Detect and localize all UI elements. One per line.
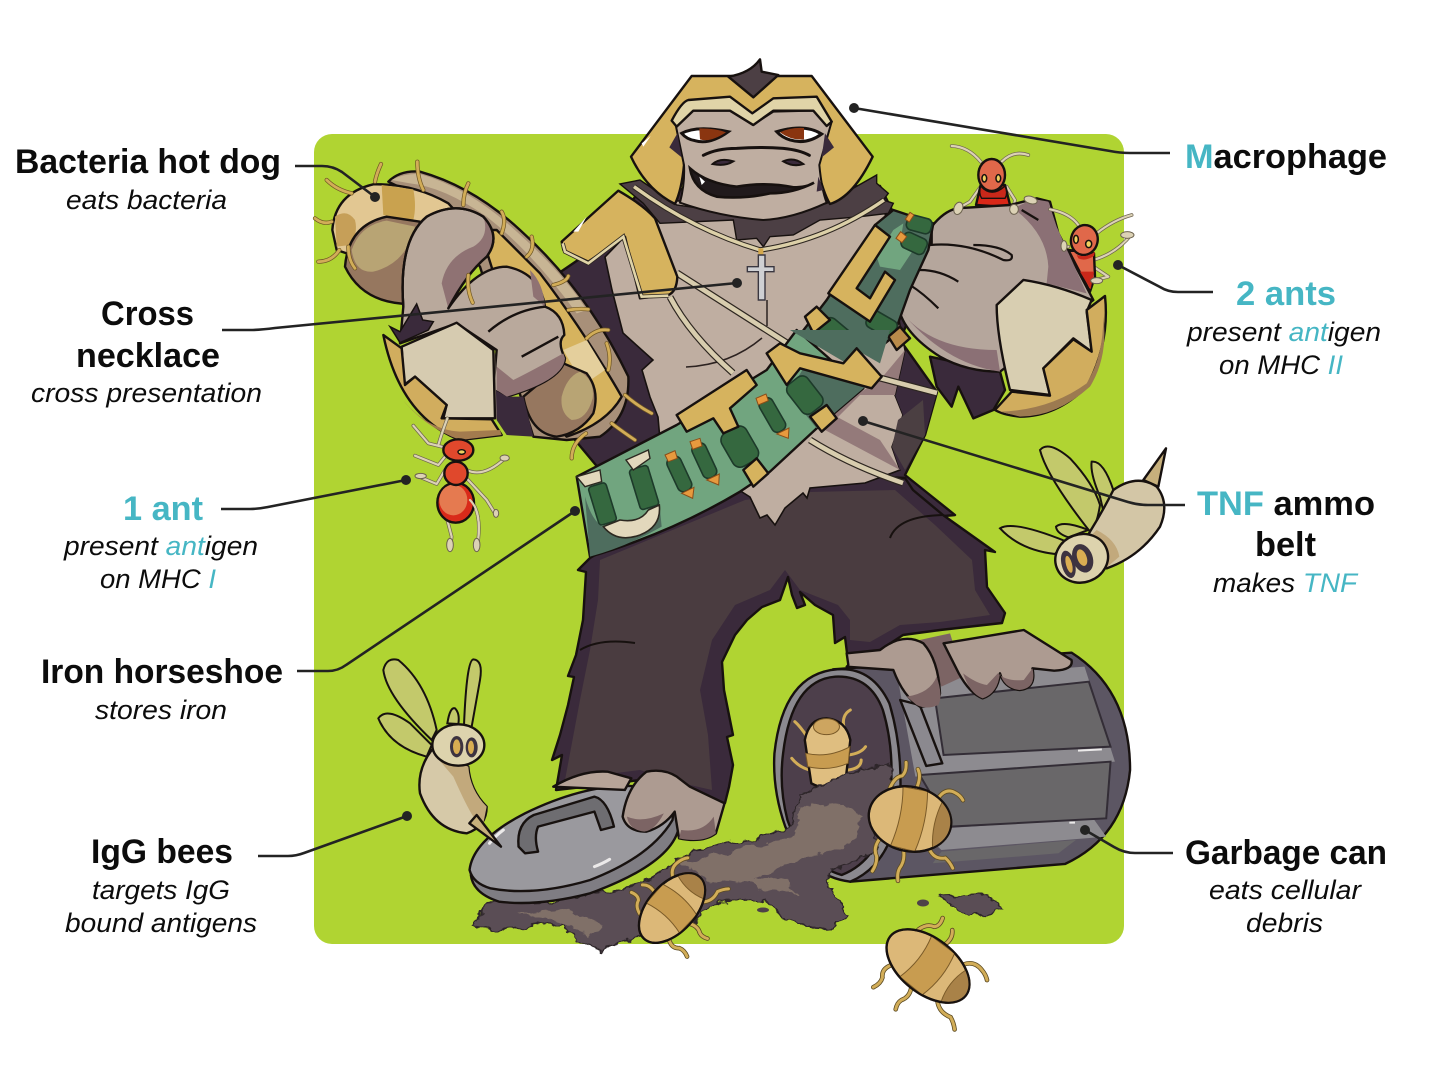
head and helmet	[631, 59, 873, 220]
label: TNF ammo belt	[1197, 485, 1375, 598]
label: IgG bees: bound antigens	[65, 908, 257, 938]
right fist and gauntlet	[898, 195, 1106, 418]
illustration: macrophage gorilla	[315, 59, 1166, 1045]
neck cord and cross	[634, 187, 884, 300]
ant: side of fist	[1050, 209, 1134, 292]
foot on lid	[553, 771, 725, 840]
connector: 1 ant	[221, 475, 411, 509]
label: 2 ants: present antigen	[1186, 317, 1381, 347]
connector: macrophage	[849, 103, 1170, 153]
connector: iron horseshoe	[297, 506, 580, 671]
label: cross necklace: Cross	[101, 295, 194, 333]
left shoulder pad	[562, 191, 677, 298]
label: 1 ant: present antigen	[63, 531, 258, 561]
label: garbage can: eats cellular	[1209, 875, 1362, 905]
cross necklace	[670, 273, 937, 483]
letter N	[767, 343, 882, 388]
label: 2 ants: on MHC II	[1219, 350, 1343, 380]
label: bacteria hot dog: eats bacteria	[66, 185, 227, 215]
label: iron horseshoe: stores iron	[95, 695, 227, 725]
label: 1 ant	[63, 490, 258, 594]
label: garbage can: Garbage can	[1185, 834, 1387, 872]
garbage can	[774, 653, 1130, 882]
iron horseshoe	[577, 450, 660, 538]
label: iron horseshoe	[41, 653, 283, 725]
trash lid	[470, 786, 679, 903]
label: 1 ant: 1 ant	[123, 490, 203, 528]
label: IgG bees: targets IgG	[92, 875, 230, 905]
label: garbage can: debris	[1246, 908, 1323, 938]
label: TNF ammo belt: makes TNF	[1213, 568, 1359, 598]
label: macrophage: Macrophage	[1185, 138, 1387, 176]
label: iron horseshoe: Iron horseshoe	[41, 653, 283, 691]
back fur of torso	[530, 186, 955, 520]
label: TNF ammo belt: belt	[1255, 526, 1316, 564]
label: 2 ants: 2 ants	[1236, 275, 1336, 313]
label: 1 ant: on MHC I	[100, 564, 216, 594]
ant: top of fist	[952, 146, 1028, 208]
label: bacteria hot dog: Bacteria hot dog	[15, 143, 281, 181]
connector: cross necklace	[222, 278, 742, 330]
TNF ammo belt	[577, 210, 933, 557]
torso	[605, 200, 937, 525]
bee: upper right	[1000, 446, 1166, 590]
bee: lower left	[378, 659, 501, 847]
connector: bacteria hot dog	[295, 166, 380, 202]
hand on can	[847, 630, 1072, 707]
lower belt	[577, 330, 890, 557]
connector: TNF ammo belt	[858, 416, 1185, 505]
label: bacteria hot dog	[15, 143, 281, 215]
debris crumbs	[757, 900, 929, 912]
connector: IgG bees	[258, 811, 412, 856]
label: cross necklace: necklace	[76, 337, 220, 375]
label: cross necklace: cross presentation	[31, 378, 262, 408]
label: IgG bees: IgG bees	[91, 833, 233, 871]
ant: one ant	[413, 418, 509, 552]
legs	[552, 470, 1005, 805]
debris spill	[473, 763, 1002, 952]
connector: 2 ants	[1113, 260, 1213, 292]
label: garbage can	[1185, 834, 1387, 938]
hot dog fist	[315, 162, 652, 458]
connector: garbage can	[1080, 825, 1173, 853]
bacteria	[614, 757, 1004, 1045]
green background panel	[314, 134, 1124, 944]
label: 2 ants	[1186, 275, 1381, 380]
upper belt	[793, 210, 933, 355]
letter T	[677, 370, 757, 433]
label: IgG bees	[65, 833, 257, 938]
label: cross necklace	[31, 295, 262, 408]
label: TNF ammo belt: TNF ammo	[1197, 485, 1375, 523]
bacterium inside the can	[792, 710, 866, 788]
fur collar	[620, 175, 893, 247]
